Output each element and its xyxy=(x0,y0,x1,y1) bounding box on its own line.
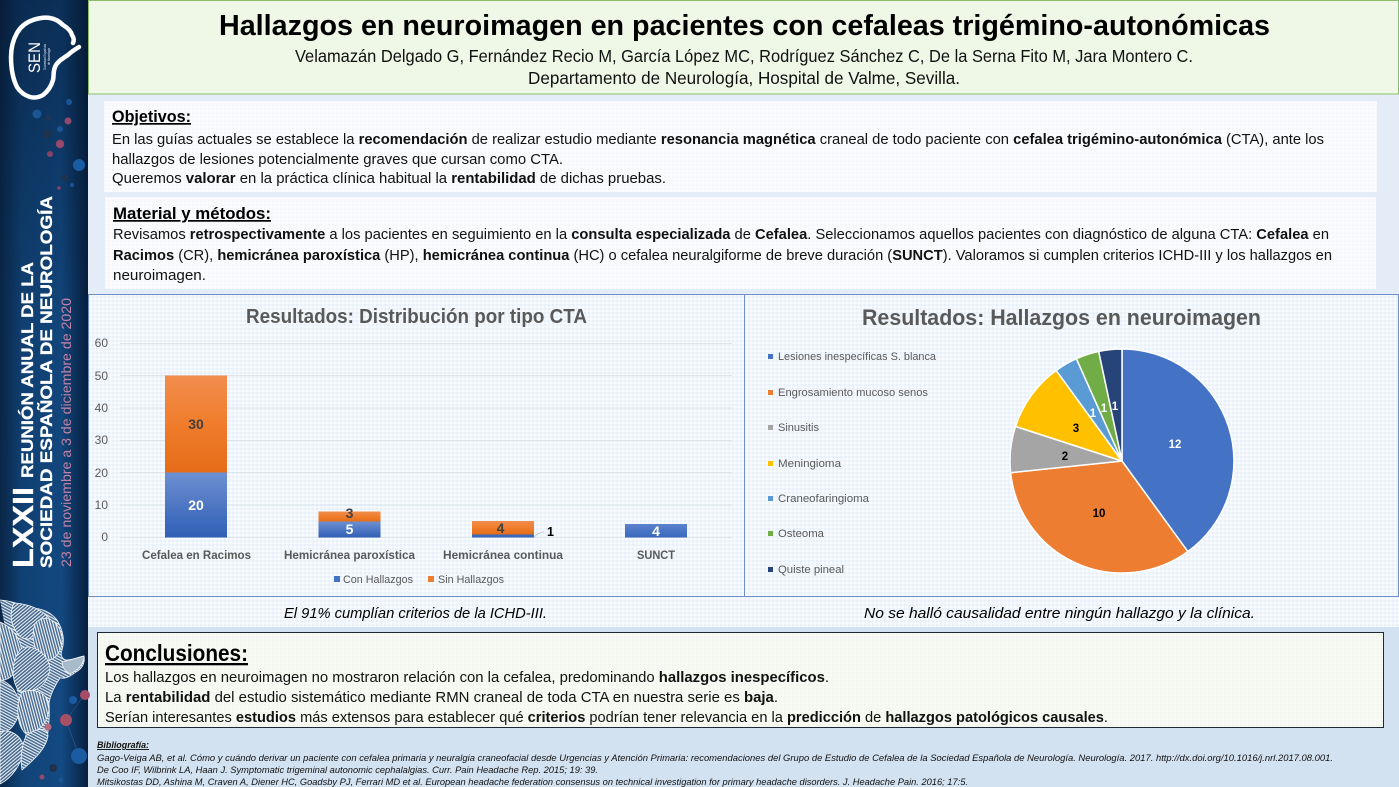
icon: SEN logo xyxy=(11,18,79,98)
pie value labels: 3 xyxy=(1073,423,1079,435)
bar: Hemicránea paroxística xyxy=(318,505,380,538)
x axis labels: Cefalea en Racimos xyxy=(142,548,251,562)
y axis labels: 30 xyxy=(95,433,108,447)
bibliography: Bibliografía: xyxy=(97,740,149,751)
sidebar congress title: SOCIEDAD ESPAÑOLA DE NEUROLOGÍA xyxy=(36,196,56,568)
affiliation: Departamento de Neurología, Hospital de Valme, Sevilla. xyxy=(528,68,960,88)
panel: material y métodos xyxy=(105,197,1376,289)
pie value labels: 10 xyxy=(1093,508,1105,520)
pie value labels: 2 xyxy=(1062,451,1068,463)
text: objetivos xyxy=(112,131,1324,187)
caption: causality: No se halló causalidad entre ningún hallazgo y la clínica. xyxy=(864,605,1255,622)
text: objetivos: En las guías actuales se establece la recomendación de realizar estudio mediante resonancia magnética craneal de todo paciente con cefalea trigémino-autonómica (CTA), ante los xyxy=(112,131,1324,148)
sidebar congress title: LXXII xyxy=(8,487,40,568)
legend: Sin Hallazgos xyxy=(438,574,504,586)
pie value labels: 1 xyxy=(1112,401,1119,413)
bar: Cefalea en Racimos: 20 xyxy=(188,497,204,513)
bibliography: De Coo IF, Wilbrink LA, Haan J. Symptomatic trigeminal autonomic cephalalgias. Curr. Pain Headache Rep. 2015; 19: 39. xyxy=(97,765,598,776)
y axis labels: 60 xyxy=(95,336,108,350)
header panel xyxy=(88,0,1398,94)
molecule dots, lower xyxy=(40,690,90,782)
text: conclusiones xyxy=(105,669,1108,726)
pie value labels: 12 xyxy=(1169,439,1181,451)
sidebar xyxy=(0,0,90,787)
pie legend: Engrosamiento mucoso senos xyxy=(778,387,929,399)
x axis labels: Hemicránea continua xyxy=(443,548,563,562)
icon: SEN logo: SEN xyxy=(26,42,44,73)
caption: diagnostic criteria: El 91% cumplían criterios de la ICHD-III. xyxy=(284,605,547,622)
pie value labels xyxy=(1062,401,1181,520)
panel: objetivos xyxy=(104,101,1377,192)
pie value labels: 1 xyxy=(1090,408,1097,420)
bar: SUNCT: 4 xyxy=(652,523,660,539)
text: conclusiones: Los hallazgos en neuroimagen no mostraron relación con la cefalea, predominando hallazgos inespecíficos. xyxy=(105,669,829,686)
sidebar congress title: REUNIÓN ANUAL DE LA xyxy=(18,262,37,478)
heading: objetivos: Objetivos: xyxy=(112,107,191,126)
x axis labels: Hemicránea paroxística xyxy=(284,548,415,562)
pie legend xyxy=(768,351,937,576)
sidebar congress title: 23 de noviembre a 3 de diciembre de 2020 xyxy=(58,298,74,567)
text: material y métodos xyxy=(113,226,1332,284)
panel: pie chart results xyxy=(744,294,1398,596)
molecule dots, upper xyxy=(32,99,85,190)
bibliography: Gago-Veiga AB, et al. Cómo y cuándo derivar un paciente con cefalea primaria y neuralgia craneofacial desde Urgencias y Atención Primaria: recomendaciones del Grupo de Estudio de Cefalea de la Sociedad Española de Neurología. Neurología. 2017. http://dx.doi.org/10.1016/j.nrl.2017.08.001. xyxy=(97,753,1333,764)
text: conclusiones: La rentabilidad del estudio sistemático mediante RMN craneal de toda CTA en nuestra serie es baja. xyxy=(105,689,778,706)
bar: Hemicránea paroxística: 5 xyxy=(346,521,354,537)
y axis labels: 40 xyxy=(95,401,108,415)
bar: Hemicránea continua: 4 xyxy=(497,520,505,536)
panel: conclusiones xyxy=(98,632,1384,728)
bar: Hemicránea continua xyxy=(472,520,554,539)
sidebar congress title xyxy=(8,196,74,568)
text: material y métodos: Revisamos retrospectivamente a los pacientes en seguimiento en la consulta especializada de Cefalea. Seleccionamos aquellos pacientes con diagnóstico de alguna CTA: Cefalea en xyxy=(113,226,1329,243)
heading: conclusiones: Conclusiones: xyxy=(105,640,248,666)
pie value labels: 1 xyxy=(1101,403,1108,415)
x axis labels: SUNCT xyxy=(637,548,676,562)
icon: SEN logo: Sociedad Española xyxy=(43,44,47,70)
authors: Velamazán Delgado G, Fernández Recio M, García López MC, Rodríguez Sánchez C, De la Serna Fito M, Jara Montero C. xyxy=(295,46,1193,66)
bibliography xyxy=(97,740,1333,787)
bar: Cefalea en Racimos xyxy=(165,376,227,538)
text: material y métodos: Racimos (CR), hemicránea paroxística (HP), hemicránea continua (HC) o cefalea neuralgiforme de breve duración (SUNCT). Valoramos si cumplen criterios ICHD-III y los hallazgos en xyxy=(113,247,1332,264)
panel: bar chart results xyxy=(88,294,744,596)
heading: material y métodos: Material y métodos: xyxy=(113,204,271,223)
bar: Hemicránea paroxística: 3 xyxy=(346,505,354,521)
legend: Con Hallazgos xyxy=(343,574,413,586)
text: material y métodos: neuroimagen. xyxy=(113,267,206,284)
legend xyxy=(334,574,504,586)
pie legend: Meningioma xyxy=(778,458,842,470)
x axis labels xyxy=(142,548,676,562)
bar: SUNCT xyxy=(625,523,687,539)
text: objetivos: Queremos valorar en la práctica clínica habitual la rentabilidad de dichas pruebas. xyxy=(112,170,666,187)
caption strip xyxy=(88,597,1399,627)
icon: wireframe brain xyxy=(0,600,84,784)
bar: Hemicránea continua: 1 xyxy=(547,525,554,539)
bar: Cefalea en Racimos: 30 xyxy=(188,416,204,432)
text: conclusiones: Serían interesantes estudios más extensos para establecer qué criterios podrían tener relevancia en la predicción de hallazgos patológicos causales. xyxy=(105,709,1108,726)
page background xyxy=(88,94,1399,627)
pie legend: Lesiones inespecíficas S. blanca xyxy=(778,351,937,363)
text: objetivos: hallazgos de lesiones potencialmente graves que cursan como CTA. xyxy=(112,151,563,168)
pie legend: Craneofaringioma xyxy=(778,493,870,505)
bar chart xyxy=(95,336,732,586)
title: Hallazgos en neuroimagen en pacientes con cefaleas trigémino-autonómicas xyxy=(219,10,1270,42)
pie chart xyxy=(1010,349,1234,573)
pie legend: Sinusitis xyxy=(778,422,819,434)
y axis labels: 0 xyxy=(101,530,108,544)
pie legend: Osteoma xyxy=(778,528,825,540)
y axis labels: 50 xyxy=(95,369,108,383)
icon: SEN logo: de Neurología xyxy=(47,48,51,65)
y axis labels: 20 xyxy=(95,466,108,480)
heading: distribution: Resultados: Distribución por tipo CTA xyxy=(246,306,587,328)
y axis labels xyxy=(95,336,108,544)
pie legend: Quiste pineal xyxy=(778,564,844,576)
heading: findings: Resultados: Hallazgos en neuroimagen xyxy=(862,305,1261,330)
y axis labels: 10 xyxy=(95,498,108,512)
